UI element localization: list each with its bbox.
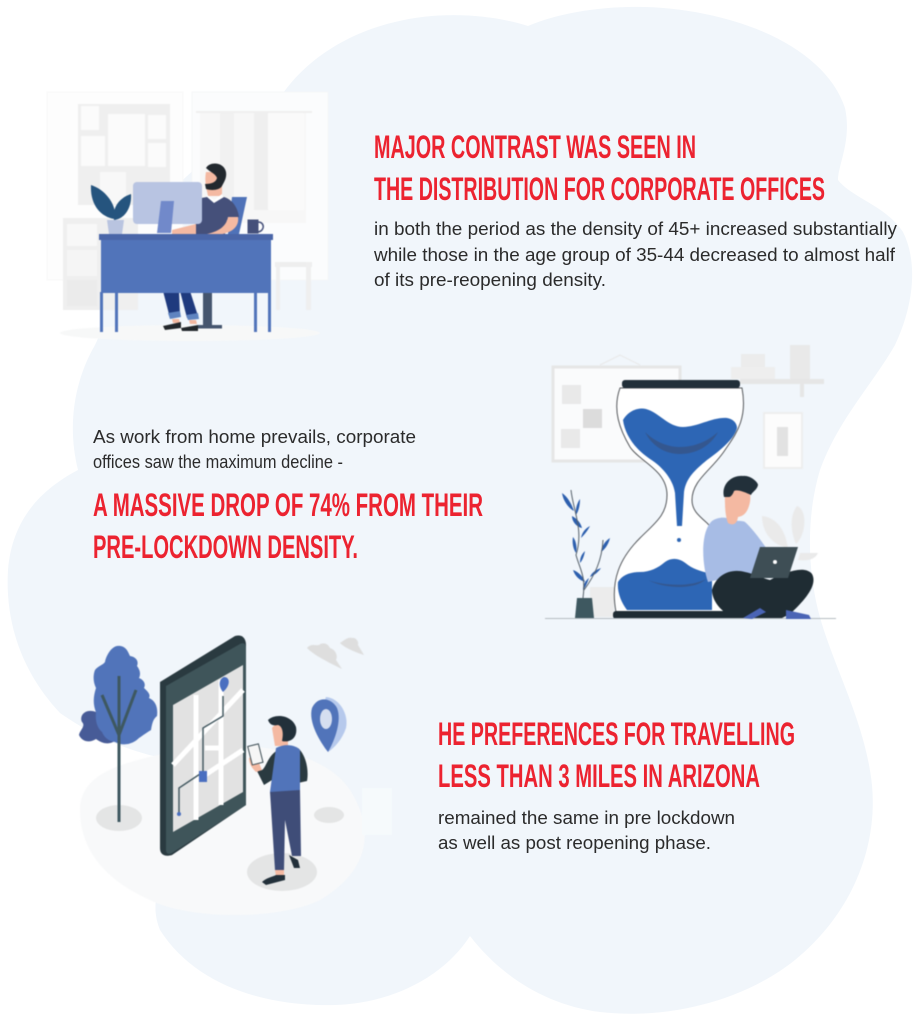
illustration: phone map xyxy=(79,635,392,915)
clouds xyxy=(307,638,364,669)
tree xyxy=(79,646,157,831)
man xyxy=(172,163,239,235)
text: density paragraph xyxy=(373,218,898,290)
text: arizona paragraph xyxy=(438,807,735,853)
heading: massive drop xyxy=(93,487,483,565)
heading: major contrast xyxy=(374,129,825,207)
text: density paragraph: while those in the age group of 35-44 decreased to almost half xyxy=(373,244,896,265)
text: arizona paragraph: remained the same in pre lockdown xyxy=(438,807,735,828)
chair xyxy=(228,197,247,234)
legs xyxy=(163,291,180,318)
hourglass glass xyxy=(614,388,744,612)
person xyxy=(247,716,317,891)
mug xyxy=(248,220,258,233)
heading: major contrast: MAJOR CONTRAST WAS SEEN IN xyxy=(374,129,696,165)
text: density paragraph: of its pre-reopening density. xyxy=(374,269,606,290)
text: density paragraph: in both the period as the density of 45+ increased substantially xyxy=(374,218,898,239)
office background furniture xyxy=(47,92,328,310)
heading: preferences xyxy=(438,716,795,794)
heading: massive drop: PRE-LOCKDOWN DENSITY. xyxy=(93,529,358,565)
text: work from home: offices saw the maximum decline - xyxy=(93,451,343,472)
small shadow xyxy=(314,807,344,823)
illustration: office desk xyxy=(47,92,328,341)
man with laptop xyxy=(703,476,813,619)
top sand xyxy=(623,408,737,526)
plant with vase xyxy=(562,493,610,590)
floor line xyxy=(545,618,836,619)
text: work from home: As work from home prevails, corporate xyxy=(93,426,416,447)
illustration: hourglass xyxy=(545,345,836,619)
text: arizona paragraph: as well as post reopening phase. xyxy=(438,832,711,853)
monitor xyxy=(133,182,202,224)
heading: massive drop: A MASSIVE DROP OF 74% FROM THEIR xyxy=(93,487,483,523)
wall decorations xyxy=(553,345,824,617)
location pin xyxy=(311,697,347,752)
text: work from home xyxy=(93,426,416,472)
phone xyxy=(160,635,246,856)
bottom sand xyxy=(618,559,712,610)
desk xyxy=(99,234,273,240)
plant xyxy=(91,185,131,220)
hourglass caps xyxy=(622,380,740,388)
ground ellipse xyxy=(80,746,365,915)
